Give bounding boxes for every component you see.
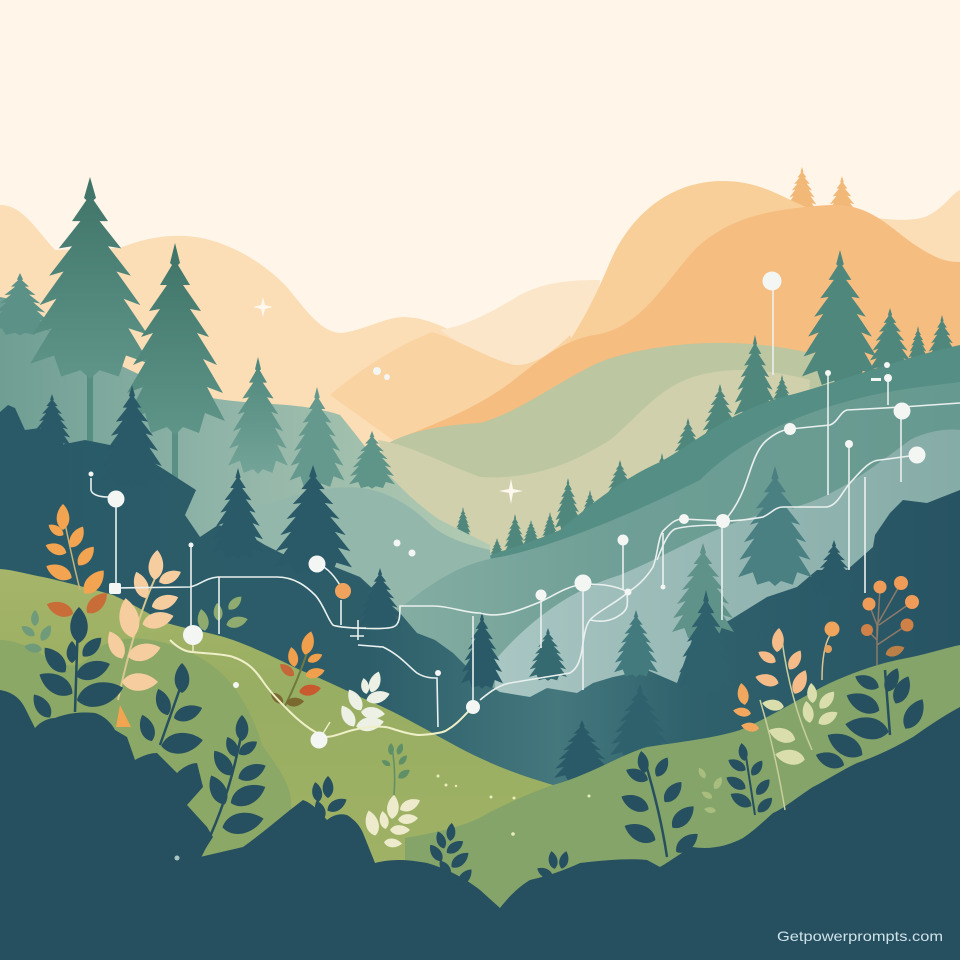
tall fir tree left — [30, 177, 150, 445]
watermark: Getpowerprompts.com — [777, 928, 943, 944]
sage hill — [385, 343, 850, 500]
plant: dark fern centre-left — [136, 663, 205, 756]
cream valley — [378, 370, 810, 600]
tall fir tree centre — [125, 243, 225, 492]
forested slope band — [440, 345, 960, 720]
plant: small orange branch — [268, 630, 326, 707]
plant: peach branch — [103, 549, 183, 727]
darker green hump — [0, 639, 291, 880]
plant: dark fern right bottom — [618, 750, 702, 857]
plant: dark fern centre-right — [724, 742, 776, 816]
left teal tree — [0, 273, 50, 335]
pale teal hill — [495, 429, 960, 720]
dark tree group left — [33, 385, 503, 689]
mid teal trees right — [529, 466, 855, 782]
centre and right slope layer — [380, 382, 960, 720]
pale yellow trail — [170, 640, 473, 737]
plant: cream branch — [363, 795, 422, 848]
distant slope trees — [455, 250, 958, 563]
orange network node — [335, 583, 351, 599]
plant: green sprig — [380, 742, 412, 795]
plant: peach and cream flower group — [732, 622, 840, 810]
foreground dark silhouette — [0, 690, 960, 960]
far right pale hill — [840, 190, 960, 300]
plant: sage sprig — [196, 594, 249, 632]
plant: dark fern left — [28, 607, 126, 721]
plant: dark ferns right — [813, 666, 930, 772]
small meadow dots — [174, 774, 590, 860]
plant: pale green sprig — [696, 766, 724, 814]
plant: dark fern bottom — [426, 823, 475, 888]
plant: tall dark fern — [200, 715, 269, 857]
left teal hill — [0, 297, 490, 720]
plant: orange berries — [861, 576, 919, 665]
large orange hills — [405, 181, 960, 460]
left yellow-green hill — [0, 569, 553, 920]
white network lines — [91, 281, 960, 727]
plant: dark leaf cluster — [310, 776, 349, 821]
network nodes — [88, 272, 926, 748]
plant: white branch — [337, 670, 391, 733]
left mid hill — [200, 487, 500, 720]
right green hill — [405, 645, 960, 920]
sparkle stars — [253, 297, 523, 504]
dark forest left silhouette — [0, 405, 960, 860]
distant orange trees — [787, 167, 860, 234]
plant: small green sprig — [19, 610, 54, 654]
plant: small dark leaves bottom — [535, 850, 571, 881]
plant: orange branch — [43, 504, 112, 620]
left mid trees — [228, 357, 395, 489]
far peach hills — [0, 205, 610, 480]
